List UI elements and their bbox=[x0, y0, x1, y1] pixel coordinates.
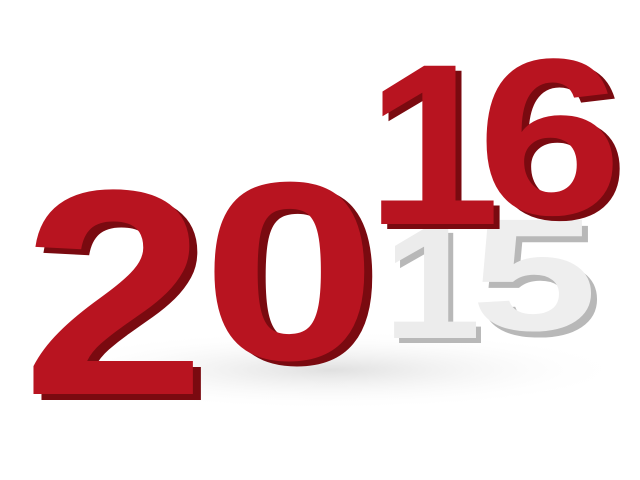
digit: gray 1 (2015): 1 bbox=[388, 198, 486, 377]
digit: red 6 (2016): 6 bbox=[477, 13, 622, 262]
digit: red 1 (2016): 1 bbox=[372, 21, 506, 278]
digit: red 0: 0 bbox=[210, 134, 385, 418]
floor shadow bbox=[30, 330, 630, 410]
digit: gray 1 (2015): 1 bbox=[383, 193, 481, 372]
digit: red 2: 2 bbox=[22, 130, 206, 457]
digit: red 1 (2016): 1 bbox=[366, 16, 500, 273]
digit: red 2: 2 bbox=[30, 136, 214, 463]
digit: gray 5 (2015): 5 bbox=[471, 185, 597, 364]
digit: red 6 (2016): 6 bbox=[484, 18, 629, 267]
digit: gray 5 (2015): 5 bbox=[477, 191, 603, 370]
digit: red 0: 0 bbox=[202, 129, 377, 413]
